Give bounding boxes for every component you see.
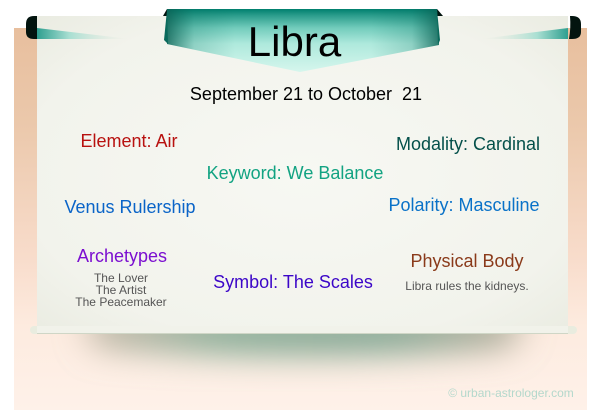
keyword: Keyword: We Balance <box>207 163 383 183</box>
archetypes list: The Peacemaker <box>75 295 167 309</box>
title: Libra <box>248 18 341 65</box>
left paper fold <box>26 16 130 39</box>
element: Element: Air <box>80 131 178 151</box>
copyright: © urban-astrologer.com <box>448 386 574 400</box>
archetypes <box>75 246 167 309</box>
symbol: Symbol: The Scales <box>213 272 373 292</box>
archetypes heading: Archetypes <box>77 246 167 266</box>
modality: Modality: Cardinal <box>396 134 540 154</box>
title ribbon <box>163 9 443 72</box>
physical body text: Libra rules the kidneys. <box>405 279 529 293</box>
paper <box>30 16 577 334</box>
archetypes list: The Artist <box>96 283 146 297</box>
date range: September 21 to October 21 <box>190 84 422 104</box>
polarity: Polarity: Masculine <box>388 195 540 215</box>
physical body <box>405 251 529 293</box>
archetypes list: The Lover <box>94 271 148 285</box>
shadow <box>85 315 525 354</box>
physical body heading: Physical Body <box>410 251 524 271</box>
venus rulership: Venus Rulership <box>64 197 196 217</box>
right paper fold <box>480 16 581 39</box>
archetypes list <box>75 271 167 309</box>
